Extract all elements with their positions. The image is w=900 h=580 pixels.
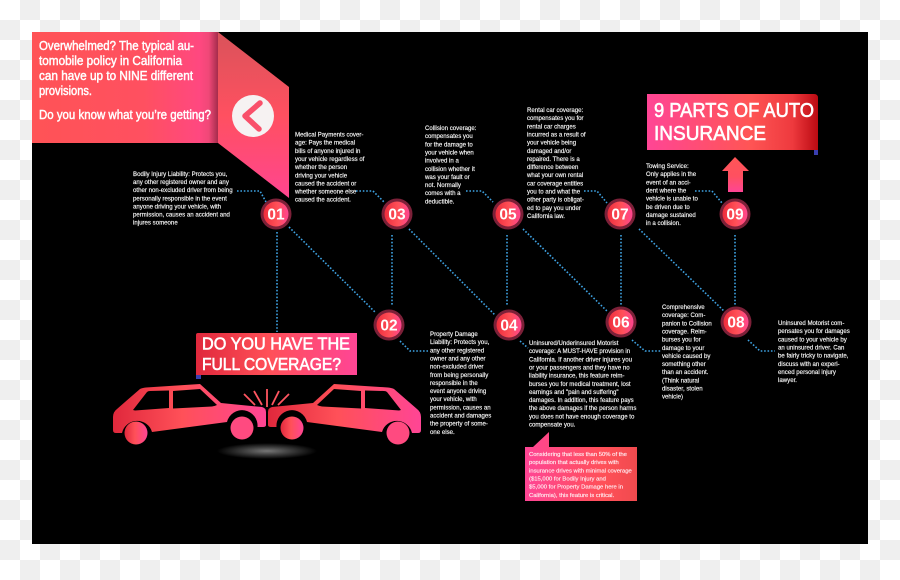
text: rental car coverage: incurred as a result of [527,131,586,138]
intro text: Overwhelmed? The typical au- [39,39,194,53]
intro text: tomobile policy in California [39,54,182,68]
text: rental car coverage: other party is obligat- [527,197,584,204]
text: uninsured motorist: an uninsured driver. Can [778,344,844,351]
text: bodily injury liability: anyone driving your vehicle, with [133,203,221,210]
text: property damage liability: from being personally [430,372,489,379]
text: collision coverage: for the damage to [425,141,473,148]
text: uninsured/underinsured motorist coverage: compensate you. [529,422,576,428]
text: bodily injury liability: other non-excluded driver from being [133,187,233,194]
step 01 marker: 01 [267,206,285,224]
banner: do you have the full coverage [196,333,357,379]
text: collision coverage: collision whether it [425,166,475,173]
text: comprehensive coverage: burses you for [662,337,701,344]
text: uninsured/underinsured motorist coverage: burses you for medical treatment, lost [529,381,631,388]
text: property damage liability: your vehicle, with [430,396,477,403]
text: property damage liability: responsible in the [430,380,478,387]
text: medical payments coverage: whether the person [294,164,347,171]
text: towing service: vehicle is unable to [646,196,698,203]
step 08 marker [720,306,752,338]
text: comprehensive coverage: vehicle caused by [662,353,711,360]
banner: do you have the full coverage: FULL COVERAGE? [202,354,341,374]
text: medical payments coverage: caused the accident. [295,197,351,204]
text: uninsured motorist: pensates you for damages [778,328,850,335]
text: medical payments coverage: whether someone else [294,189,357,196]
text: rental car coverage: damaged and/or [527,148,571,155]
text: uninsured motorist: enced personal injury [778,369,837,376]
text: bodily injury liability: injures someone [133,220,178,227]
callout: minimal coverage note: California), this feature is critical. [529,493,614,499]
text: medical payments coverage: Medical Payments cover- [295,132,363,138]
text: comprehensive coverage: vehicle) [662,394,683,401]
text: uninsured/underinsured motorist coverage: Uninsured/Underinsured Motorist [529,340,619,347]
text: comprehensive coverage: coverage: Com- [662,312,705,319]
intro text [39,39,211,122]
text: bodily injury liability: permission, causes an accident and [133,212,230,218]
step 09 marker: 09 [726,206,744,224]
title banner [647,94,818,155]
text: uninsured/underinsured motorist coverage: coverage: A MUST-HAVE provision in [529,348,630,355]
text: medical payments coverage: bills of anyone injured in [295,148,360,155]
step 06 marker: 06 [612,314,630,332]
text: uninsured motorist: Uninsured Motorist com- [778,320,844,327]
text: bodily injury liability: personally responsible in the event [133,195,227,202]
text: collision coverage: not. Normally [425,182,462,189]
text: collision coverage: compensates you [425,133,473,140]
text: uninsured/underinsured motorist coverage: earnings and "pain and suffering" [529,389,619,396]
left car [113,384,266,444]
intro text: Do you know what you’re getting? [39,108,211,122]
text: towing service: dent where the [646,187,687,194]
step 02 marker: 02 [380,318,398,334]
illustration: crashed cars [113,384,421,459]
folded ribbon with back button [218,32,289,198]
callout: minimal coverage note: insurance drives with minimal coverage [529,468,633,474]
text: rental car coverage: you to and what the [527,188,581,196]
text: comprehensive coverage: disaster, stolen [662,386,703,392]
callout: minimal coverage note: population that actually drives with [529,460,619,466]
text: medical payments coverage: your vehicle regardless of [295,156,365,163]
text: rental car coverage: repaired. There is a [527,156,580,163]
text: rental car coverage: your vehicle being [527,140,576,147]
text: property damage liability: Liability: Protects you, [430,339,490,346]
step 04 marker: 04 [500,318,518,334]
step 02 marker [374,310,404,340]
step 08 marker: 08 [727,314,745,332]
text: comprehensive coverage: something other [662,361,706,368]
text: medical payments coverage: caused the accident or [295,180,356,187]
text: comprehensive coverage: (Think natural [662,377,699,384]
text: uninsured/underinsured motorist coverage: California. If another driver injures you [529,356,632,363]
text: collision coverage: comes with a [425,190,461,197]
step 05 marker [492,198,524,230]
text: property damage liability: accident and damages [430,412,491,420]
step 06 marker [606,306,636,338]
banner: do you have the full coverage: DO YOU HAVE THE [202,334,350,354]
step 05 marker: 05 [499,206,517,224]
text: comprehensive coverage: damage to your [662,345,704,352]
text: towing service: Towing Service: [646,163,689,170]
text: property damage liability: non-excluded driver [430,364,484,371]
text: collision coverage: Collision coverage: [425,125,477,132]
step 04 marker [494,310,524,340]
text: property damage liability: the property of some- [430,421,488,428]
text: uninsured motorist: lawyer. [778,377,797,384]
step 07 marker: 07 [611,206,629,224]
text: bodily injury liability: any other registered owner and any [133,179,230,186]
intro text: provisions. [39,84,92,98]
text: towing service: damage sustained [646,212,696,219]
text: medical payments coverage: driving your vehicle [295,172,348,179]
text: property damage liability: event anyone driving [430,388,486,395]
text: comprehensive coverage: than an accident. [662,369,709,376]
text: medical payments coverage: age: Pays the medical [295,140,355,147]
callout: minimal coverage note [525,432,637,501]
text: rental car coverage: rental car charges [527,123,576,130]
intro text: can have up to NINE different [39,69,193,83]
text: uninsured motorist: caused to your vehicle by [778,336,848,343]
text: towing service: in a collision. [646,220,681,227]
text: property damage liability: Property Damage [430,331,478,338]
text: rental car coverage: compensates you for [527,115,584,122]
text: rental car coverage: car coverage entitles [527,180,583,187]
text: rental car coverage: ed to pay you under [527,205,581,212]
text: collision coverage: involved in a [425,158,459,165]
callout: minimal coverage note: ($15,000 for Bodily Injury and [529,476,606,482]
text: towing service: Only applies in the [646,171,697,178]
text: property damage liability: one else. [430,429,455,436]
title banner: 9 PARTS OF AUTO [654,100,814,122]
text: collision coverage: was your fault or [424,174,470,181]
step 07 marker [604,198,636,230]
text: uninsured motorist: be fairly tricky to navigate, [778,353,849,360]
arrow pointing to title [722,157,749,192]
step 03 marker: 03 [388,206,406,224]
text: comprehensive coverage: coverage. Reim- [662,328,707,335]
title banner: INSURANCE [654,123,766,145]
text: bodily injury liability: Bodily Injury Liability: Protects you, [133,171,227,178]
text: uninsured/underinsured motorist coverage: you does not have enough coverage to [529,413,635,420]
step 09 marker [720,198,750,230]
callout: minimal coverage note: Considering that less than 50% of the [529,452,628,458]
text: uninsured/underinsured motorist coverage: the above damages if the person harms [529,405,636,412]
text: property damage liability: any other registered [430,347,484,354]
text: collision coverage: your vehicle when [425,149,474,156]
text: rental car coverage: difference between [527,164,578,171]
text: towing service: be driven due to [646,204,690,211]
text: uninsured/underinsured motorist coverage: or your passengers and they have no [529,364,630,371]
text: towing service: event of an acci- [646,179,691,186]
dotted connector lines [237,191,775,351]
text: uninsured/underinsured motorist coverage: liability insurance, this feature reim- [529,373,625,380]
step 03 marker [382,198,412,230]
step 01 marker [260,198,292,230]
text: uninsured motorist: discuss with an experi- [778,361,840,368]
impact lines [244,389,289,407]
ground shadow [217,443,317,459]
text: property damage liability: owner and any other [430,355,486,362]
text: comprehensive coverage: Comprehensive [662,304,705,311]
text: collision coverage: deductible. [425,198,455,205]
text: property damage liability: permission, causes an [430,404,491,411]
text: comprehensive coverage: panion to Collision [662,320,712,327]
text: rental car coverage: what your own rental [526,172,583,179]
text: rental car coverage: California law. [527,213,565,220]
text: uninsured/underinsured motorist coverage: damages. In addition, this feature pays [529,397,634,404]
icon: back chevron [232,95,274,137]
panel: intro header [32,32,218,143]
text: rental car coverage: Rental car coverage: [527,107,584,114]
callout: minimal coverage note: $5,000 for Property Damage here in [529,485,623,491]
right car [268,384,421,444]
